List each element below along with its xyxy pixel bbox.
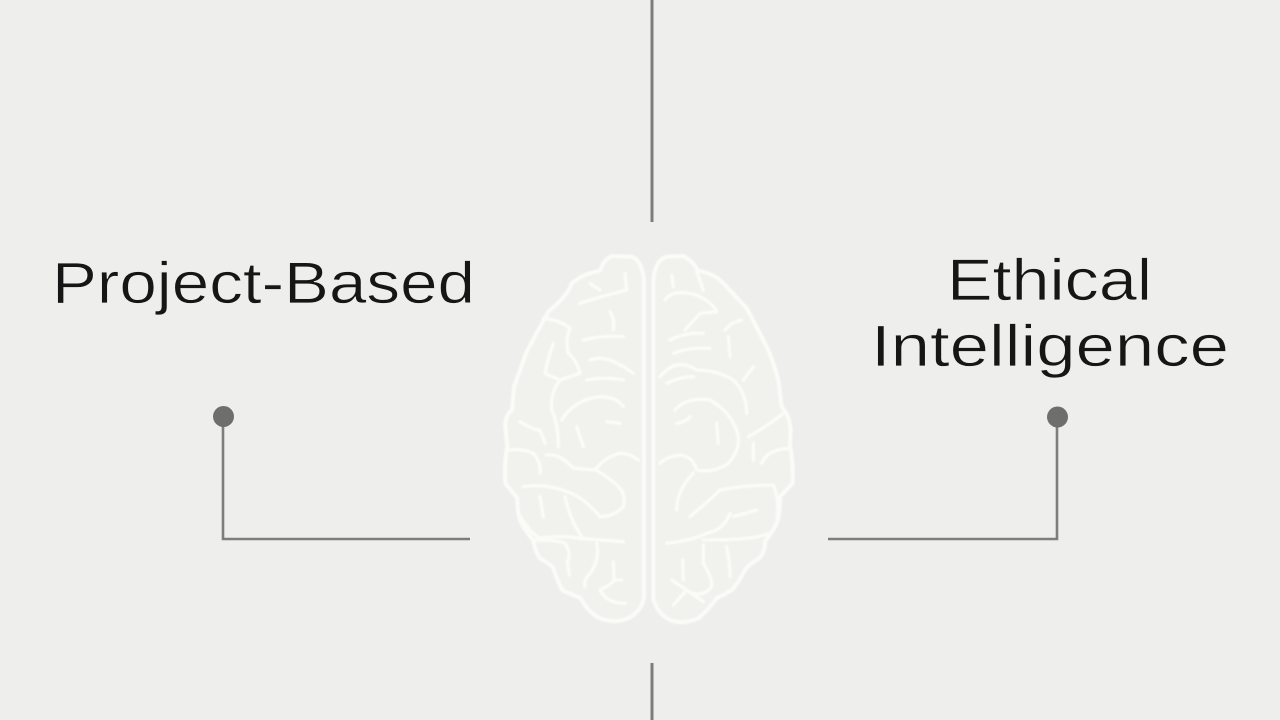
left hemisphere [505, 256, 644, 621]
center vertical line: top [650, 0, 654, 222]
right hemisphere [653, 256, 793, 622]
connector: right [828, 406, 1068, 539]
heading: Ethical Intelligence: Ethical [947, 248, 1152, 313]
icon: brain [505, 256, 793, 622]
heading: Project-Based: Project-Based [52, 251, 475, 316]
center vertical line: bottom [650, 663, 654, 720]
heading: Ethical Intelligence: Intelligence [871, 314, 1229, 379]
connector: left [213, 406, 470, 539]
heading: Ethical Intelligence [871, 248, 1229, 379]
